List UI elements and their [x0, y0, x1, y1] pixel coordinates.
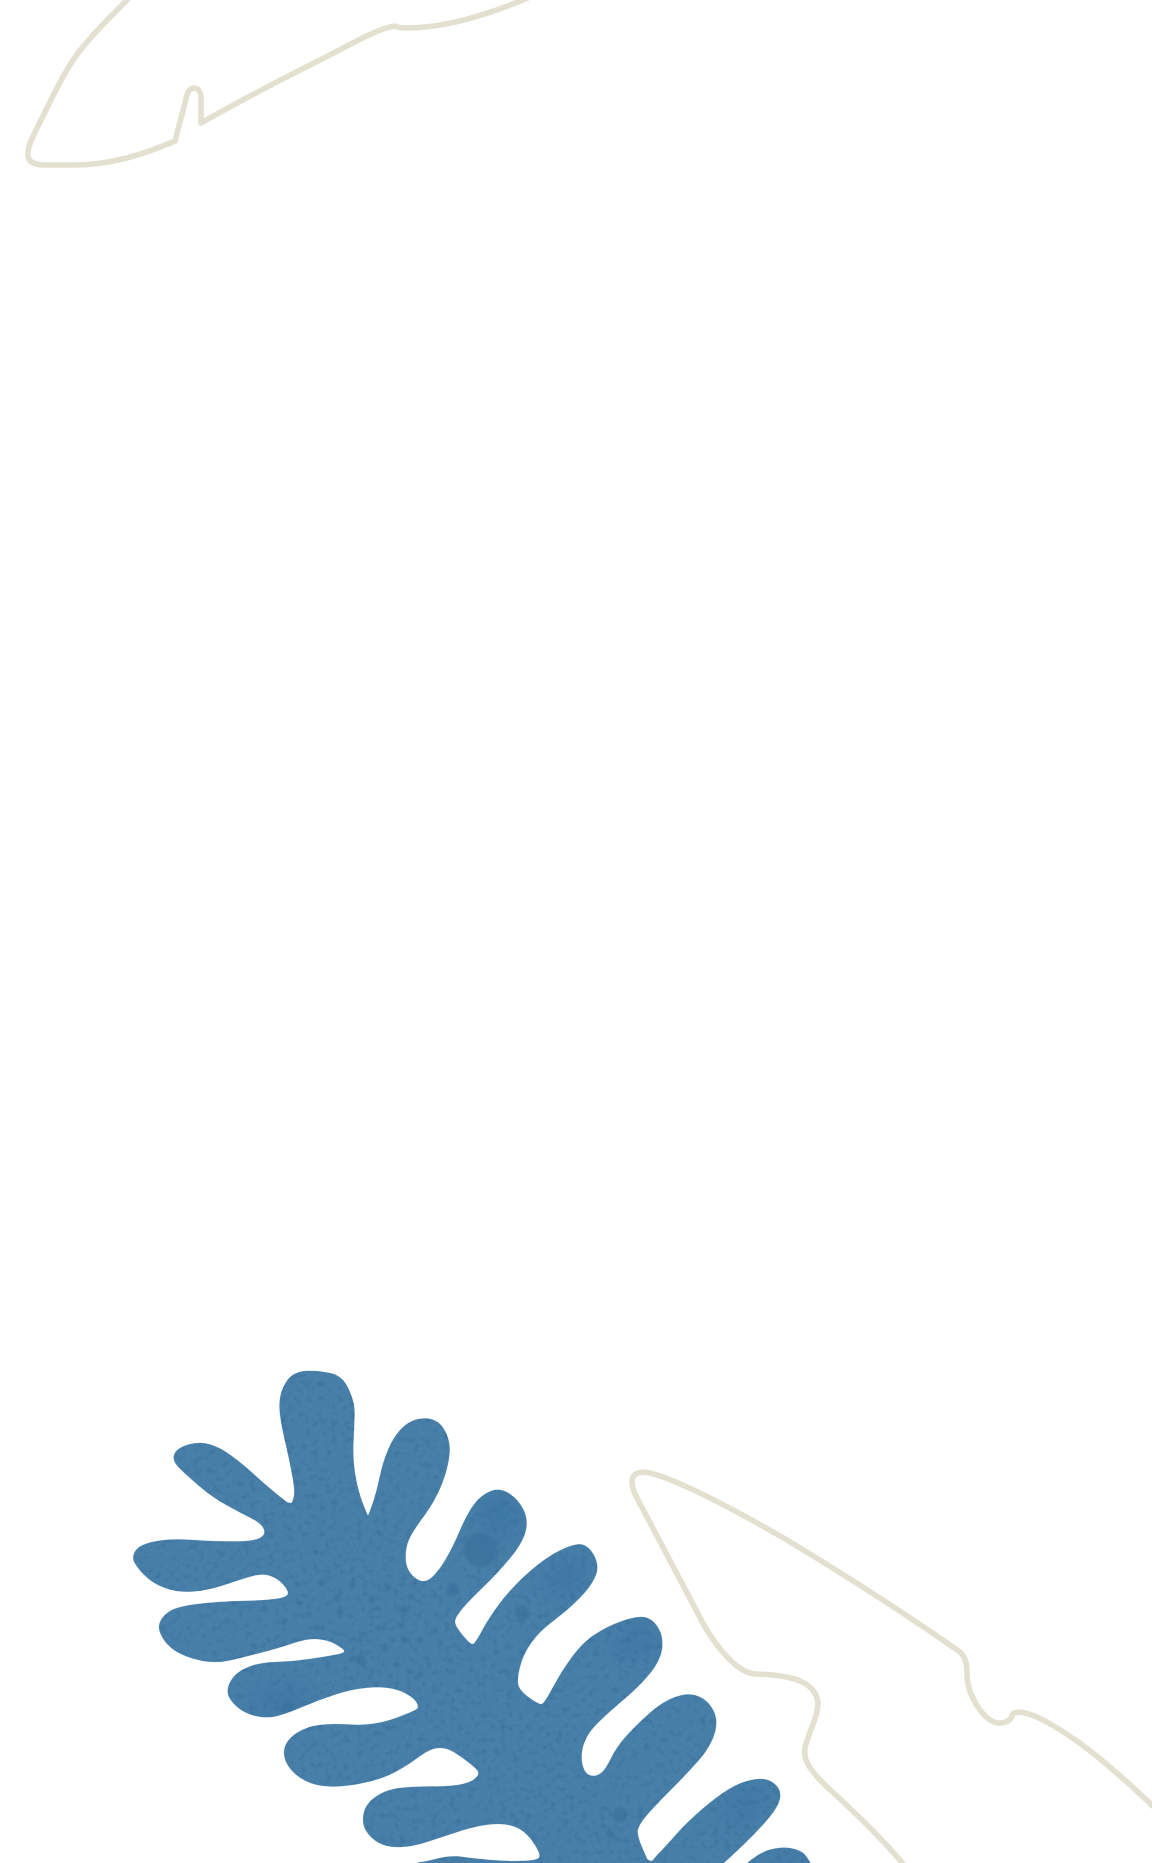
leaf body: [134, 1371, 830, 1863]
top outline leaf: [28, 0, 530, 165]
leaf tonal shading: [250, 1493, 801, 1863]
bottom outline leaf: [632, 1472, 1152, 1863]
blue leaf cut-out: [134, 1371, 830, 1863]
